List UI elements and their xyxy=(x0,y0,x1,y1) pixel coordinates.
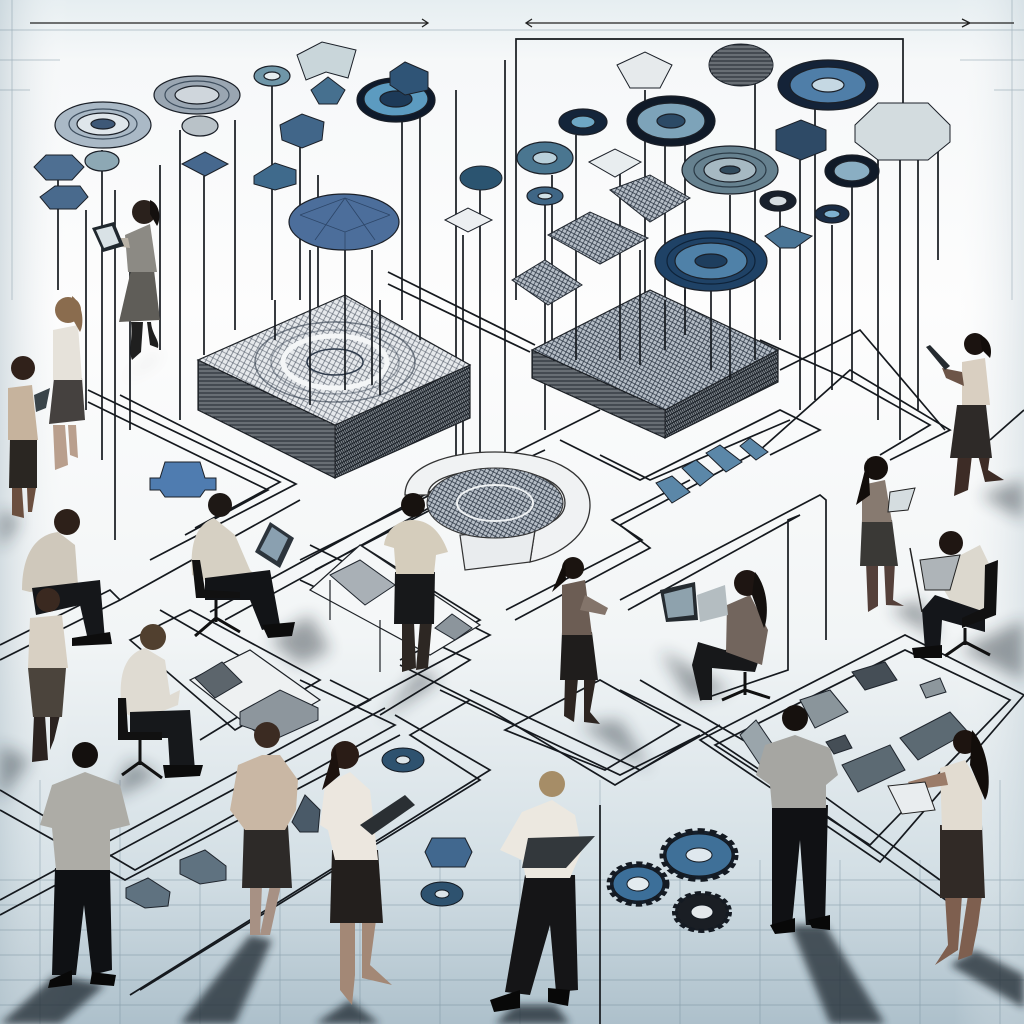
person: woman standing centre xyxy=(552,557,608,724)
person: woman with tablet bottom xyxy=(320,741,415,1005)
server xyxy=(292,795,320,832)
server xyxy=(330,560,395,605)
disc xyxy=(527,187,563,205)
cluster xyxy=(548,212,648,264)
person: seated man far left xyxy=(22,509,112,646)
person: woman far right xyxy=(888,730,989,965)
upper vertical connector lines xyxy=(58,60,938,540)
gear xyxy=(610,864,666,904)
person: seated man right xyxy=(910,531,998,658)
hex xyxy=(390,62,428,95)
connector lines ending on block tops xyxy=(275,100,755,405)
dotted sphere xyxy=(709,44,773,86)
person: woman left edge xyxy=(8,356,50,518)
person: man standing bottom left xyxy=(40,742,130,988)
people xyxy=(8,200,1004,1012)
top arrows xyxy=(30,19,1014,27)
person: woman right top xyxy=(926,333,1004,496)
box xyxy=(126,878,170,908)
disc xyxy=(825,155,879,187)
person: woman right with tablet xyxy=(856,456,915,612)
hex xyxy=(297,42,356,80)
hex xyxy=(254,163,296,190)
hex xyxy=(40,186,88,209)
person: woman blonde standing xyxy=(49,296,85,470)
floor shadows xyxy=(0,350,1024,1024)
hex xyxy=(776,120,826,160)
hex xyxy=(280,114,324,148)
gear xyxy=(675,893,729,931)
hex xyxy=(182,152,228,176)
hex xyxy=(311,77,345,104)
hex xyxy=(34,155,84,180)
disc xyxy=(517,142,573,174)
soft shadows on the floor xyxy=(0,350,1024,800)
disc xyxy=(559,109,607,135)
box xyxy=(180,850,226,884)
server xyxy=(800,690,848,728)
person: woman with tablet top left xyxy=(92,200,160,360)
cluster xyxy=(512,260,582,305)
tables xyxy=(190,545,480,735)
hex xyxy=(855,103,950,160)
disc xyxy=(655,231,767,291)
disc xyxy=(778,60,878,110)
hex xyxy=(150,462,216,497)
disc xyxy=(254,66,290,86)
gear small xyxy=(460,166,502,190)
person: woman in trousers centre bottom xyxy=(490,771,595,1012)
device xyxy=(740,720,775,765)
hex xyxy=(589,149,641,177)
disc xyxy=(682,146,778,194)
server xyxy=(195,662,242,698)
disc with network lines xyxy=(289,194,399,250)
disc xyxy=(357,78,435,122)
connector beam between blocks xyxy=(388,272,535,352)
gears xyxy=(382,748,735,931)
gear xyxy=(421,882,463,906)
device xyxy=(826,735,852,754)
mesh clusters xyxy=(460,44,773,305)
gear xyxy=(382,748,424,772)
disc xyxy=(55,102,151,148)
block left xyxy=(198,295,470,478)
device xyxy=(920,678,946,698)
person: woman with phone left xyxy=(28,588,68,762)
block right xyxy=(532,290,778,438)
hex xyxy=(765,226,812,248)
disc xyxy=(627,96,715,146)
disc xyxy=(85,151,119,171)
floating discs xyxy=(55,60,879,291)
person: seated man with laptop xyxy=(192,493,295,638)
disc xyxy=(760,191,796,211)
ring structure xyxy=(405,452,590,570)
gear xyxy=(663,831,735,879)
desk devices and servers xyxy=(126,560,968,908)
hex xyxy=(445,208,492,232)
strong shadows at the bottom xyxy=(0,925,1024,1024)
block left centre swirl xyxy=(255,322,415,402)
person: man standing right xyxy=(756,705,838,934)
floating hexagons xyxy=(34,42,950,867)
server xyxy=(842,745,905,792)
server xyxy=(240,690,318,738)
disc xyxy=(815,205,849,223)
hex xyxy=(425,838,472,867)
device xyxy=(852,662,897,690)
person: seated man left desk xyxy=(118,624,203,778)
person: woman center xyxy=(384,493,448,672)
small floating cards xyxy=(656,438,768,503)
disc xyxy=(154,76,240,114)
disc xyxy=(182,116,218,136)
hex xyxy=(617,52,672,88)
cluster xyxy=(610,175,690,222)
person: seated woman with laptop xyxy=(660,570,770,700)
person: woman bottom left standing xyxy=(230,722,298,935)
server xyxy=(900,712,968,760)
server xyxy=(435,614,472,640)
